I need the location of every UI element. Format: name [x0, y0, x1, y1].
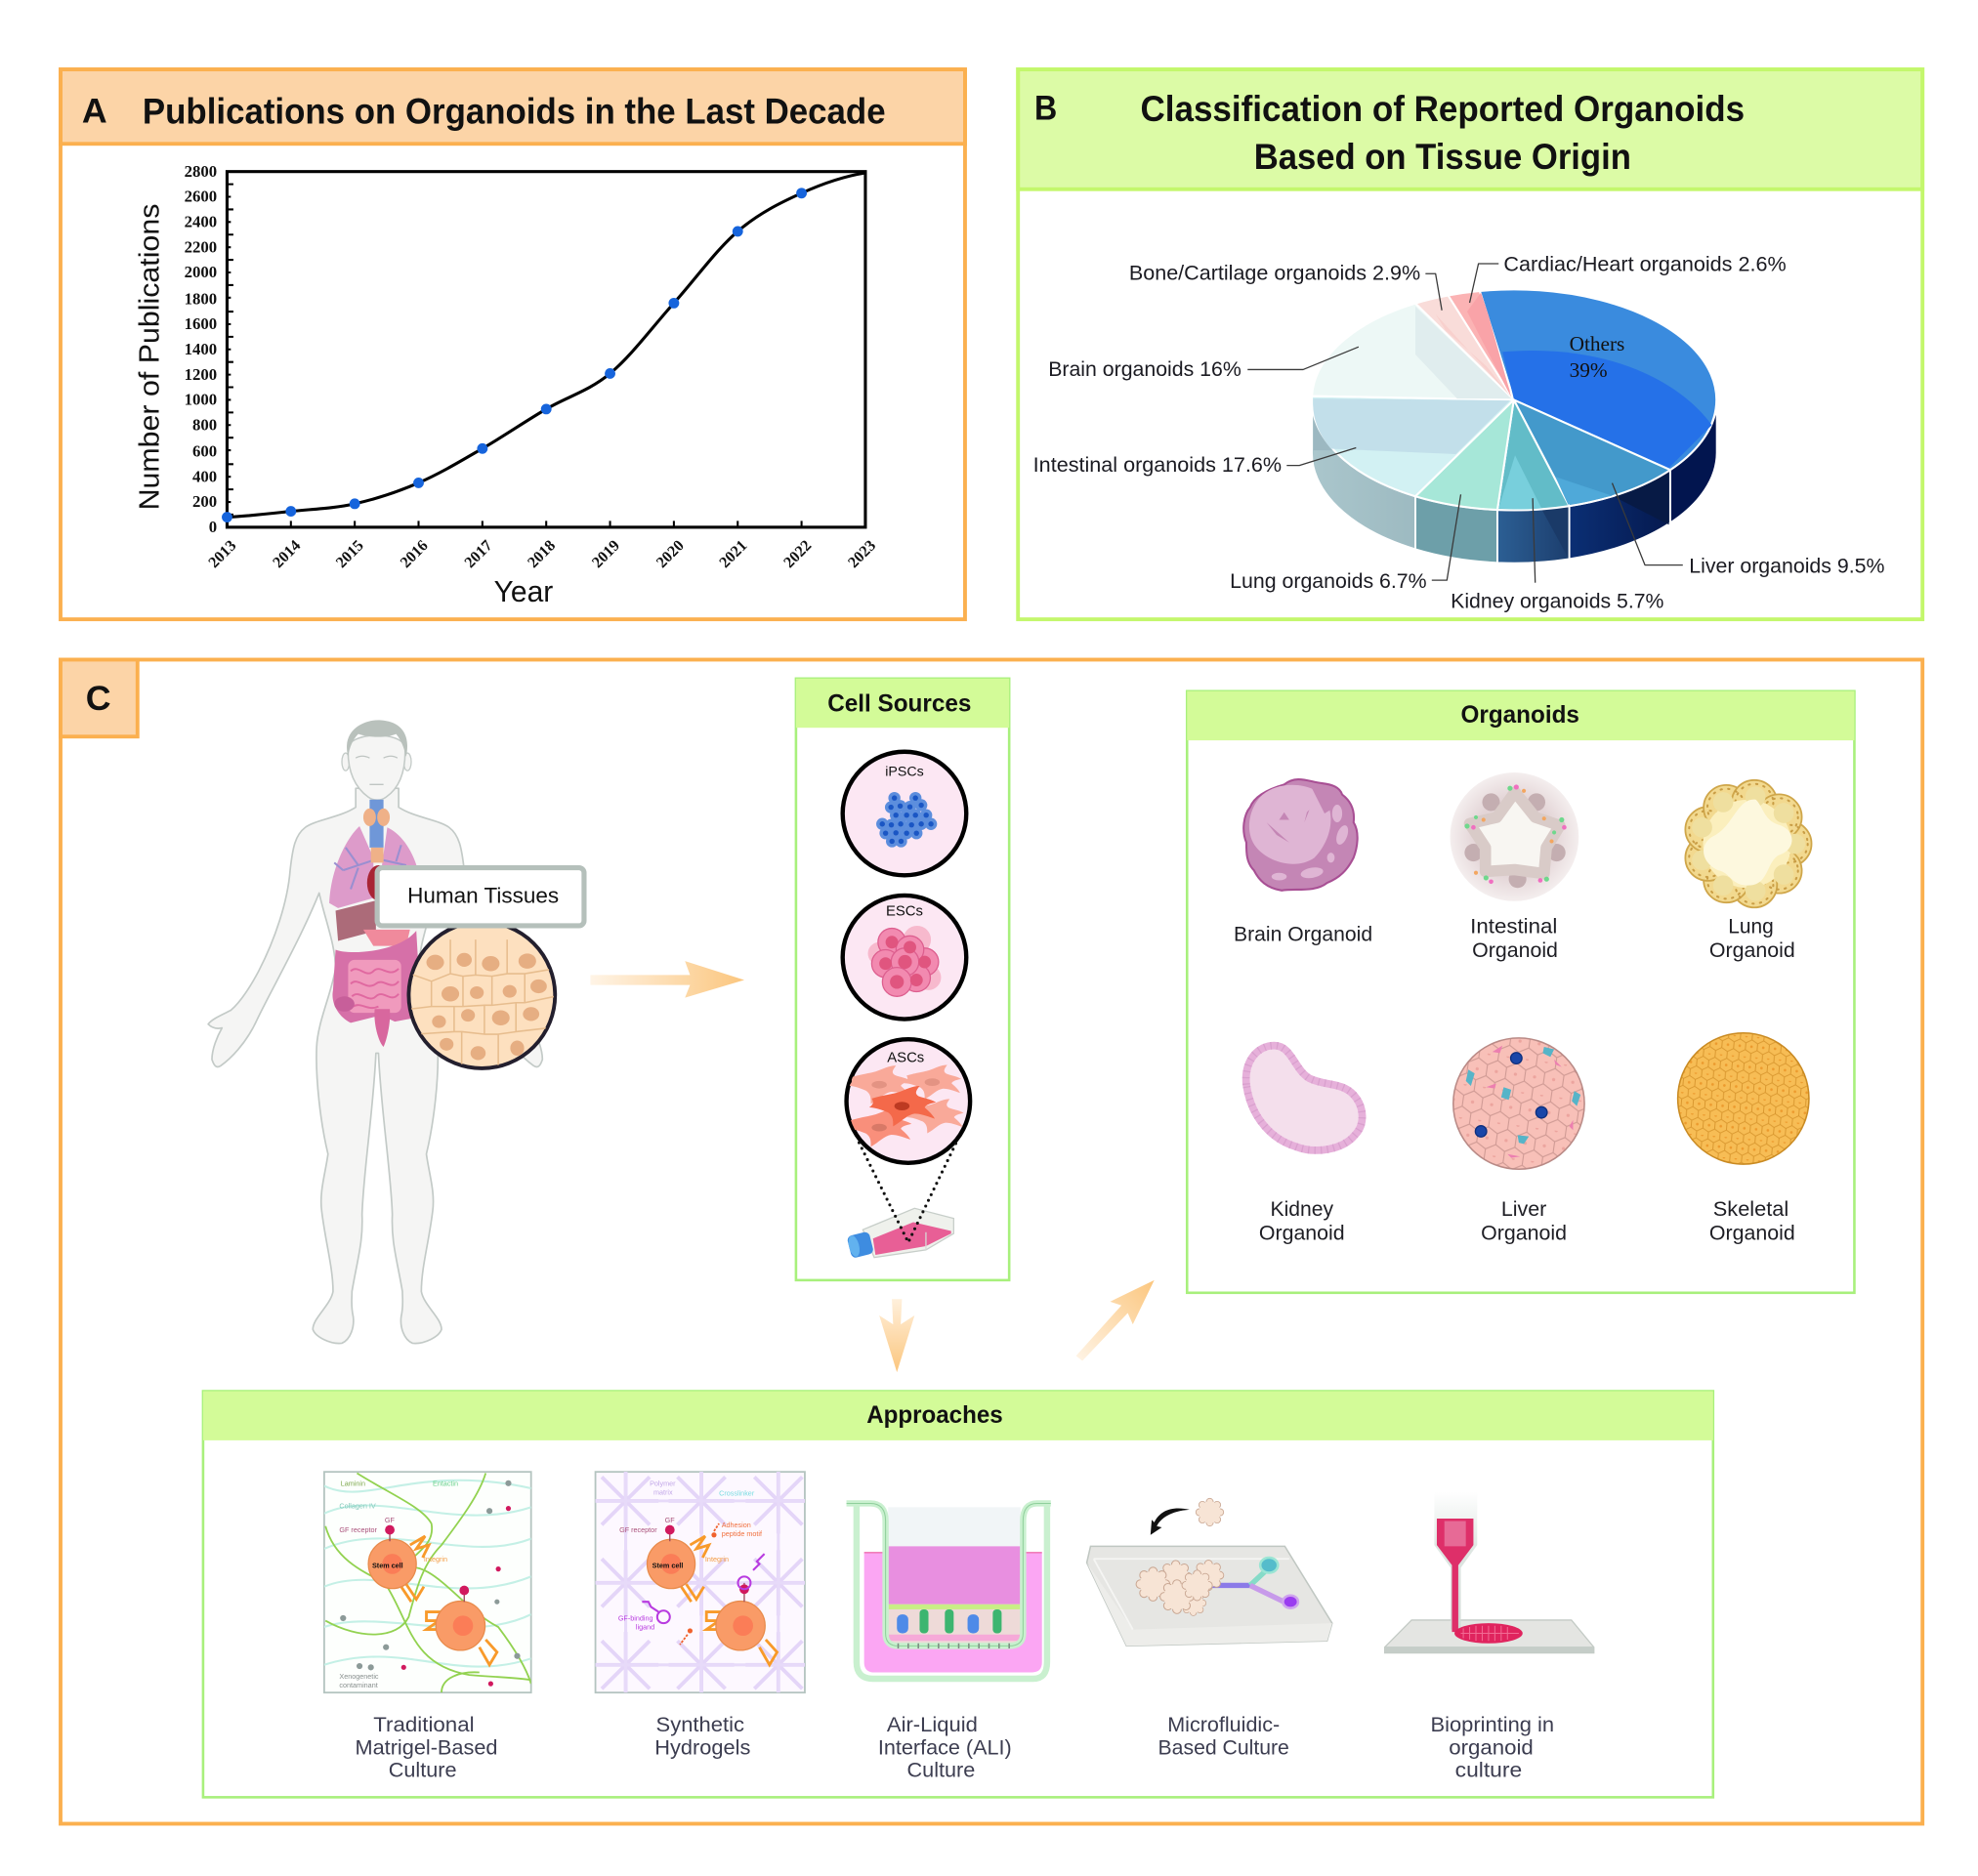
synthetic hydrogel illustration: GF [665, 1516, 675, 1524]
pie labels: Intestinal organoids 17.6% [1033, 453, 1282, 477]
panel C letter: C [86, 680, 111, 718]
Matrigel illustration: Collagen IV [339, 1502, 376, 1511]
x-axis tick labels: 2016 [398, 537, 432, 571]
ears [342, 753, 411, 771]
intestinal organoid [1451, 772, 1578, 901]
face [356, 756, 398, 784]
panel: cell sources [796, 679, 1009, 1280]
Matrigel illustration: Xenogenetic [339, 1672, 379, 1681]
panel B letter: B [1034, 90, 1057, 128]
x-axis tick labels: 2017 [462, 537, 496, 571]
x-axis tick labels: 2014 [270, 537, 304, 571]
label: bioprinting: organoid [1449, 1735, 1534, 1759]
label: liver organoid: Organoid [1481, 1222, 1567, 1245]
label: traditional matrigel: Traditional [373, 1713, 475, 1736]
label: traditional matrigel: Matrigel-Based [356, 1735, 497, 1759]
label: synthetic hydrogels: Hydrogels [654, 1735, 750, 1759]
synthetic hydrogel illustration [593, 1468, 811, 1697]
y-axis tick labels: 600 [192, 442, 217, 461]
pie labels: Bone/Cartilage organoids 2.9% [1129, 262, 1420, 285]
pie side shading [1313, 401, 1669, 558]
label: microfluidic culture [1158, 1713, 1289, 1759]
x-axis tick labels: 2023 [845, 537, 879, 571]
label: lung organoid [1709, 915, 1795, 962]
x-axis tick labels: 2015 [333, 537, 367, 571]
panel C tab [61, 659, 138, 736]
panel A: publications line chart [61, 69, 965, 619]
panel: organoids [1187, 691, 1854, 1293]
y-axis tick labels: 2600 [185, 188, 217, 206]
data points [222, 188, 807, 522]
label: air-liquid interface: Interface (ALI) [878, 1735, 1012, 1759]
colon [332, 931, 421, 1022]
label: air-liquid interface [878, 1713, 1012, 1782]
label: traditional matrigel: Culture [389, 1759, 457, 1782]
label: others: Others [1570, 332, 1624, 355]
arrow: tissues to cell sources [590, 961, 744, 998]
3D pie chart [1247, 264, 1717, 583]
organoids title: Organoids [1461, 702, 1579, 729]
panel B title [1140, 88, 1745, 177]
skeletal organoid [1678, 1033, 1809, 1164]
label: others [1570, 332, 1624, 382]
label: human tissues [377, 868, 584, 926]
x-axis tick labels: 2018 [525, 537, 559, 571]
label: kidney organoid: Organoid [1259, 1222, 1345, 1245]
approaches title: Approaches [866, 1402, 1003, 1429]
synthetic hydrogel illustration: Adhesion [722, 1521, 751, 1529]
label: brain organoid: Brain Organoid [1234, 922, 1372, 945]
ASCs circle: ASCs [887, 1050, 924, 1065]
kidney organoid [1246, 1046, 1363, 1150]
thyroid [363, 809, 390, 862]
iPSCs circle: iPSCs [885, 764, 924, 779]
y-axis tick labels [185, 162, 217, 536]
liver organoid [1453, 1038, 1584, 1169]
pie labels: Cardiac/Heart organoids 2.6% [1503, 253, 1787, 276]
arrow: cell sources to approaches [879, 1299, 914, 1372]
small intestine [348, 960, 401, 1013]
label: air-liquid interface: Culture [907, 1759, 975, 1782]
leader lines [1247, 264, 1683, 583]
cell sources header [796, 679, 1009, 728]
line chart [135, 162, 879, 608]
pie labels [1033, 253, 1884, 613]
heart [367, 865, 390, 900]
Matrigel illustration: contaminant [339, 1681, 378, 1689]
organoid cluster [1136, 1560, 1224, 1615]
y-axis tick labels: 1200 [185, 365, 217, 384]
Matrigel illustration: Integrin [424, 1555, 447, 1563]
label: skeletal organoid [1709, 1197, 1795, 1245]
approaches header [203, 1392, 1713, 1440]
arrow: approaches to organoids [1076, 1280, 1155, 1361]
y-axis title: Number of Publications [135, 204, 166, 510]
iPSCs circle [843, 752, 966, 875]
label: microfluidic culture: Based Culture [1158, 1735, 1289, 1759]
label: intestinal organoid [1470, 915, 1558, 962]
pie shading facets [1313, 293, 1712, 549]
channels [1212, 1567, 1289, 1605]
synthetic hydrogel illustration: GF-binding [618, 1614, 653, 1623]
label: human tissues: Human Tissues [407, 884, 559, 908]
label: lung organoid: Lung [1728, 915, 1774, 938]
Matrigel illustration [324, 1472, 531, 1692]
panel C: organoid workflow [61, 659, 1922, 1823]
synthetic hydrogel illustration: Polymer [650, 1479, 676, 1487]
air-liquid interface illustration [847, 1503, 1051, 1679]
label: bioprinting: Bioprinting in [1431, 1713, 1554, 1736]
label: liver organoid [1481, 1197, 1567, 1245]
Matrigel illustration: GF [385, 1516, 396, 1524]
label: kidney organoid [1259, 1197, 1345, 1245]
synthetic hydrogel illustration: ligand [636, 1623, 654, 1632]
y-axis tick labels: 0 [209, 518, 217, 536]
label: intestinal organoid: Organoid [1472, 938, 1558, 962]
Matrigel illustration: Laminin [341, 1479, 365, 1487]
brain organoid [1243, 779, 1358, 891]
rectum [374, 1009, 390, 1047]
ASCs circle [847, 1039, 970, 1163]
human body illustration [208, 720, 584, 1344]
panel B: tissue-origin pie chart [1018, 69, 1922, 619]
pie labels: Brain organoids 16% [1048, 357, 1242, 381]
Matrigel illustration: Entactin [433, 1479, 458, 1487]
panel A title: Publications on Organoids in the Last Decade [143, 91, 886, 132]
panel A letter: A [82, 92, 107, 130]
label: skeletal organoid: Organoid [1709, 1222, 1795, 1245]
y-axis tick labels: 1400 [185, 340, 217, 358]
y-axis tick labels: 1600 [185, 314, 217, 333]
label: traditional matrigel [356, 1713, 497, 1782]
y-axis tick labels: 2400 [185, 213, 217, 231]
head [348, 735, 405, 800]
label: synthetic hydrogels: Synthetic [656, 1713, 744, 1736]
x-axis tick labels: 2021 [717, 537, 750, 571]
panel A header [61, 69, 965, 144]
synthetic hydrogel illustration: matrix [653, 1487, 673, 1496]
y-axis tick labels: 200 [192, 492, 217, 511]
x-axis tick labels: 2020 [653, 537, 688, 571]
panel: approaches [203, 1392, 1713, 1797]
body silhouette [208, 788, 546, 1344]
dotted zoom lines [859, 1143, 956, 1242]
x-axis title: Year [494, 574, 553, 608]
y-axis tick labels: 400 [192, 467, 217, 485]
label: kidney organoid: Kidney [1270, 1197, 1333, 1221]
y-axis tick labels: 800 [192, 415, 217, 434]
label: air-liquid interface: Air-Liquid [887, 1713, 978, 1736]
Matrigel illustration: Stem cell [372, 1561, 403, 1569]
panel B title: Based on Tissue Origin [1254, 136, 1631, 177]
synthetic hydrogel illustration: Stem cell [652, 1561, 683, 1569]
curved arrow [1151, 1508, 1190, 1535]
pie labels: Kidney organoids 5.7% [1451, 590, 1663, 613]
panel B frame [1018, 69, 1922, 619]
label: bioprinting: culture [1455, 1759, 1522, 1782]
pie labels: Liver organoids 9.5% [1689, 554, 1884, 577]
y-axis tick labels: 2000 [185, 263, 217, 281]
label: bioprinting [1431, 1713, 1554, 1782]
Matrigel illustration: GF receptor [339, 1525, 378, 1534]
callout: zoomed tissue [408, 922, 555, 1068]
label: synthetic hydrogels [654, 1713, 750, 1759]
stomach [363, 930, 410, 946]
x-axis tick labels: 2013 [206, 537, 239, 571]
x-axis tick labels: 2022 [780, 537, 815, 571]
liver [336, 900, 376, 940]
label: others: 39% [1570, 358, 1608, 382]
bioprinting illustration [1385, 1492, 1594, 1653]
label: intestinal organoid: Intestinal [1470, 915, 1557, 938]
y-axis tick labels: 2200 [185, 237, 217, 256]
x-axis tick labels: 2019 [589, 537, 623, 571]
data line [227, 173, 865, 518]
ESCs circle [843, 896, 966, 1020]
panel B title: Classification of Reported Organoids [1140, 88, 1745, 129]
y-axis tick labels: 1800 [185, 289, 217, 308]
y-axis tick labels: 2800 [185, 162, 217, 181]
synthetic hydrogel illustration: Integrin [705, 1555, 729, 1563]
panel B header [1018, 69, 1922, 189]
trachea [369, 800, 384, 848]
label: lung organoid: Organoid [1709, 938, 1795, 962]
cecum [334, 996, 355, 1012]
hair [347, 720, 407, 757]
culture flask [847, 1208, 953, 1259]
panel A frame [61, 69, 965, 619]
panel C frame [61, 659, 1922, 1823]
x-axis tick labels [206, 537, 879, 571]
synthetic hydrogel illustration: Crosslinker [719, 1489, 755, 1498]
synthetic hydrogel illustration: GF receptor [619, 1525, 657, 1534]
lung organoid [1685, 780, 1812, 907]
y-axis tick labels: 1000 [185, 391, 217, 409]
pie side walls [1312, 396, 1717, 563]
label: skeletal organoid: Skeletal [1713, 1197, 1789, 1221]
floating organoid [1196, 1498, 1224, 1526]
organoids header [1187, 691, 1854, 740]
synthetic hydrogel illustration: peptide motif [722, 1529, 763, 1538]
ESCs circle: ESCs [886, 904, 923, 920]
pie labels: Lung organoids 6.7% [1230, 569, 1427, 593]
bronchi [334, 845, 406, 890]
cell sources title: Cell Sources [827, 690, 971, 717]
lungs [329, 826, 421, 908]
label: liver organoid: Liver [1501, 1197, 1546, 1221]
microfluidic chip illustration [1087, 1498, 1332, 1646]
label: microfluidic culture: Microfluidic- [1167, 1713, 1280, 1736]
pie slices [1312, 289, 1716, 510]
